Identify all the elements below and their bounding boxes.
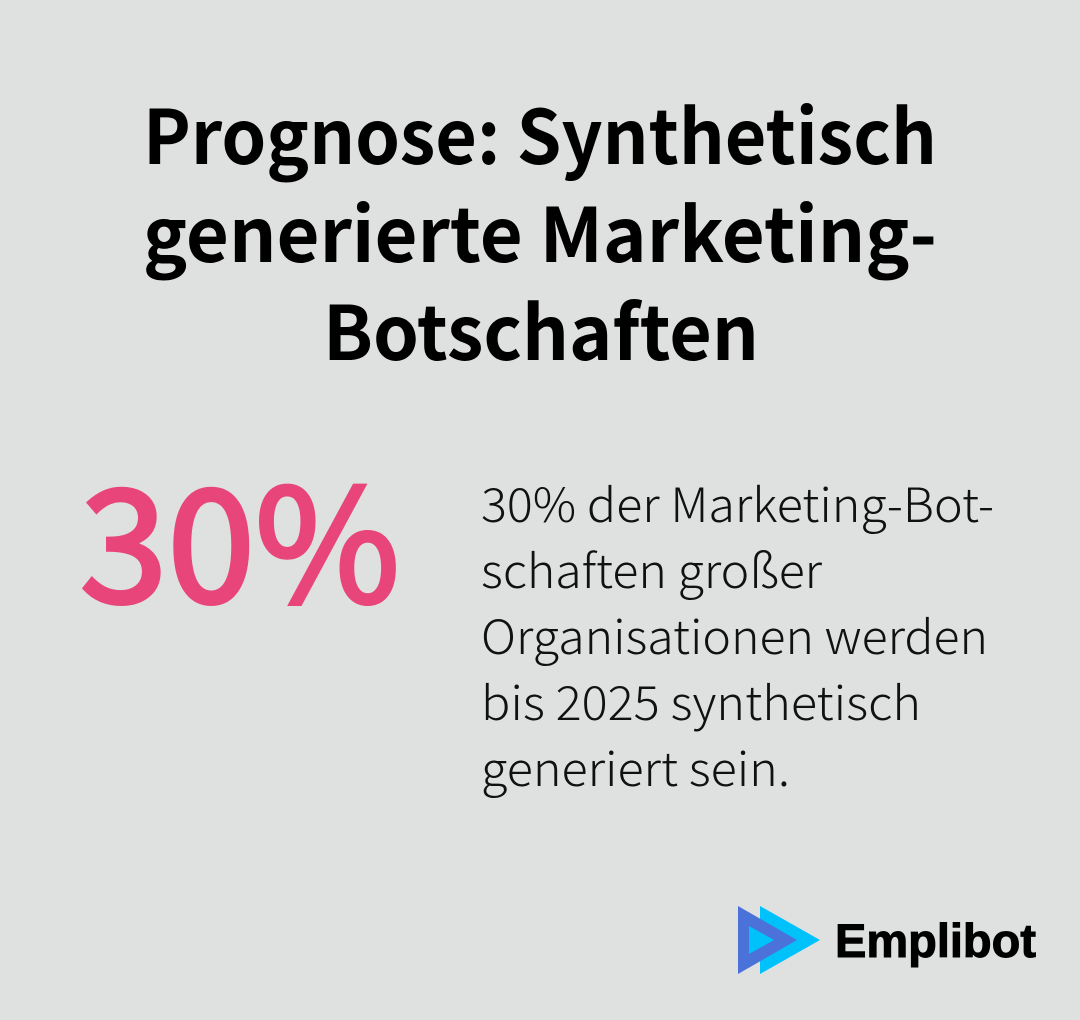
wordmark: Emplibot bbox=[835, 914, 1036, 967]
title: Prognose: Synthetisch bbox=[143, 77, 937, 186]
description text: Organisationen werden bbox=[481, 599, 988, 668]
title: generierte Marketing- bbox=[143, 175, 937, 284]
logo: Emplibot bbox=[738, 906, 1036, 974]
description text: generiert sein. bbox=[481, 731, 790, 800]
title bbox=[143, 77, 937, 382]
title: Botschaften bbox=[323, 273, 759, 382]
description text: 30% der Marketing-Bot- bbox=[481, 467, 994, 536]
description text: schaften großer bbox=[481, 533, 822, 602]
icon: play triangles bbox=[738, 906, 820, 974]
description text: bis 2025 synthetisch bbox=[481, 665, 921, 734]
big statistic: 30%: 30% bbox=[80, 421, 400, 647]
description text bbox=[481, 467, 994, 800]
